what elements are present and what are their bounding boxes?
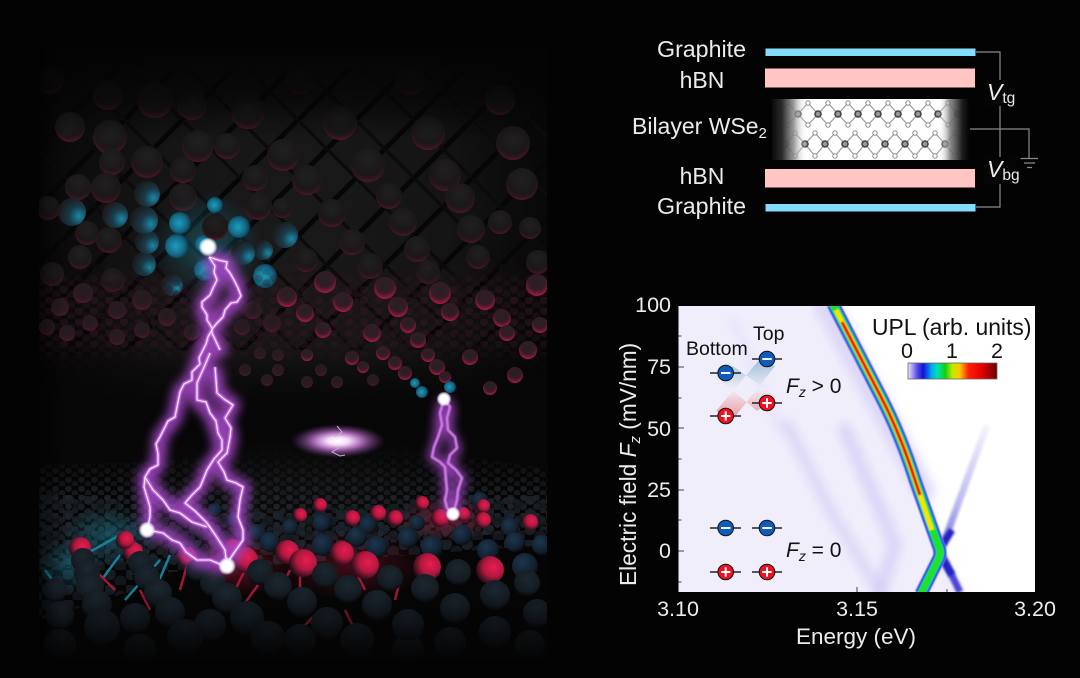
ceiling spheres — [39, 271, 548, 398]
left floor lattice rows — [39, 490, 135, 620]
inset: Fz greater than 0 band diagram — [686, 323, 841, 424]
floor bottom fade — [39, 590, 547, 660]
label Graphite bottom: Graphite — [657, 193, 746, 219]
y axis title: Electric field F — [615, 444, 641, 586]
darkening at top of lattice — [39, 48, 515, 129]
energy levels zero field — [710, 528, 782, 572]
left edge fade — [39, 88, 58, 619]
top hBN layer — [765, 68, 975, 88]
shaded transitions — [716, 360, 776, 418]
label Top: Top — [753, 323, 785, 345]
V top gate label — [983, 79, 1015, 107]
x tick labels: 3.15 — [836, 597, 878, 621]
y tick labels: 50 — [647, 417, 671, 441]
colored floor glow — [42, 500, 486, 594]
label Graphite top: Graphite — [657, 36, 746, 62]
electron right — [759, 520, 775, 536]
lightning bolts — [144, 257, 462, 567]
top graphite layer — [766, 48, 976, 56]
main exciton line — [833, 304, 940, 594]
upper lattice spheres — [36, 65, 550, 292]
label Bottom: Bottom — [686, 338, 748, 360]
label Fz=0: F — [786, 539, 800, 562]
X branches — [938, 425, 987, 592]
wiring — [968, 52, 1029, 207]
y tick labels — [635, 293, 671, 563]
bilayer WSe2 lattice — [772, 99, 970, 160]
inset: Fz equal 0 band diagram — [710, 520, 841, 580]
x tick labels: 3.10 — [657, 597, 699, 621]
panel: lattice illustration with lightning — [39, 82, 547, 648]
lightning core — [144, 257, 243, 567]
dark horizon band — [160, 378, 425, 448]
colorbar labels: 1 — [946, 339, 958, 363]
x tick labels — [657, 597, 1056, 621]
panel: UPL heatmap chart — [615, 290, 1056, 649]
y tick labels: 100 — [635, 293, 671, 317]
ground symbol — [1020, 158, 1038, 168]
heatmap — [678, 306, 989, 592]
y axis title: z — [627, 436, 644, 445]
x axis title: Energy (eV) — [796, 624, 916, 649]
floor spheres — [44, 492, 547, 646]
y tick labels: 0 — [659, 539, 671, 563]
panel: device schematic — [632, 36, 1038, 219]
colorbar labels: 0 — [901, 339, 913, 363]
label Bilayer WSe2: 2 — [759, 125, 767, 142]
label hBN top: hBN — [680, 67, 724, 93]
lavender background region — [678, 306, 964, 592]
V bottom gate label — [983, 156, 1020, 184]
colorbar labels: 2 — [991, 339, 1003, 363]
V bottom gate label: V — [987, 156, 1002, 182]
hole right — [759, 564, 775, 580]
electron bottom — [718, 365, 734, 381]
y tick labels: 25 — [647, 478, 671, 502]
label Fz>0: > 0 — [806, 375, 841, 398]
V top gate label: tg — [1002, 90, 1015, 107]
mid floor lattice — [120, 495, 547, 575]
bottom graphite layer — [766, 204, 976, 212]
hole left — [718, 564, 734, 580]
colorbar — [908, 363, 997, 379]
legend title: UPL (arb. units) — [872, 314, 1031, 340]
label hBN bottom: hBN — [680, 163, 724, 189]
energy levels — [710, 359, 782, 416]
plot background — [678, 306, 1035, 592]
colorbar labels — [901, 339, 1003, 363]
faint side bands — [776, 306, 938, 592]
x tick labels: 3.20 — [1014, 597, 1056, 621]
label Fz>0: F — [786, 375, 800, 398]
upper atomic lattice bonds — [90, 108, 496, 350]
y tick labels: 75 — [647, 355, 671, 379]
charge nodes — [138, 238, 460, 575]
V bottom gate label: bg — [1002, 167, 1020, 184]
central exciton glow — [292, 425, 384, 457]
teal lit spheres near top node — [58, 181, 298, 302]
distant ceiling lattice — [39, 266, 547, 356]
bottom hBN layer — [765, 169, 975, 188]
distant floor lattice — [39, 450, 547, 570]
label Bilayer WSe2: Bilayer WSe — [632, 113, 759, 139]
V top gate label: V — [987, 79, 1002, 105]
electron left — [718, 520, 734, 536]
hole bottom — [718, 408, 734, 424]
label Fz>0: z — [798, 384, 806, 400]
floor bonds — [44, 534, 400, 626]
lightning glow halo — [145, 257, 462, 567]
hole top — [759, 395, 775, 411]
electron top — [759, 351, 775, 367]
axis ticks — [678, 336, 947, 592]
label Fz=0: = 0 — [806, 539, 841, 562]
label Fz=0: z — [798, 548, 806, 564]
y axis title: (mV/nm) — [615, 343, 641, 436]
